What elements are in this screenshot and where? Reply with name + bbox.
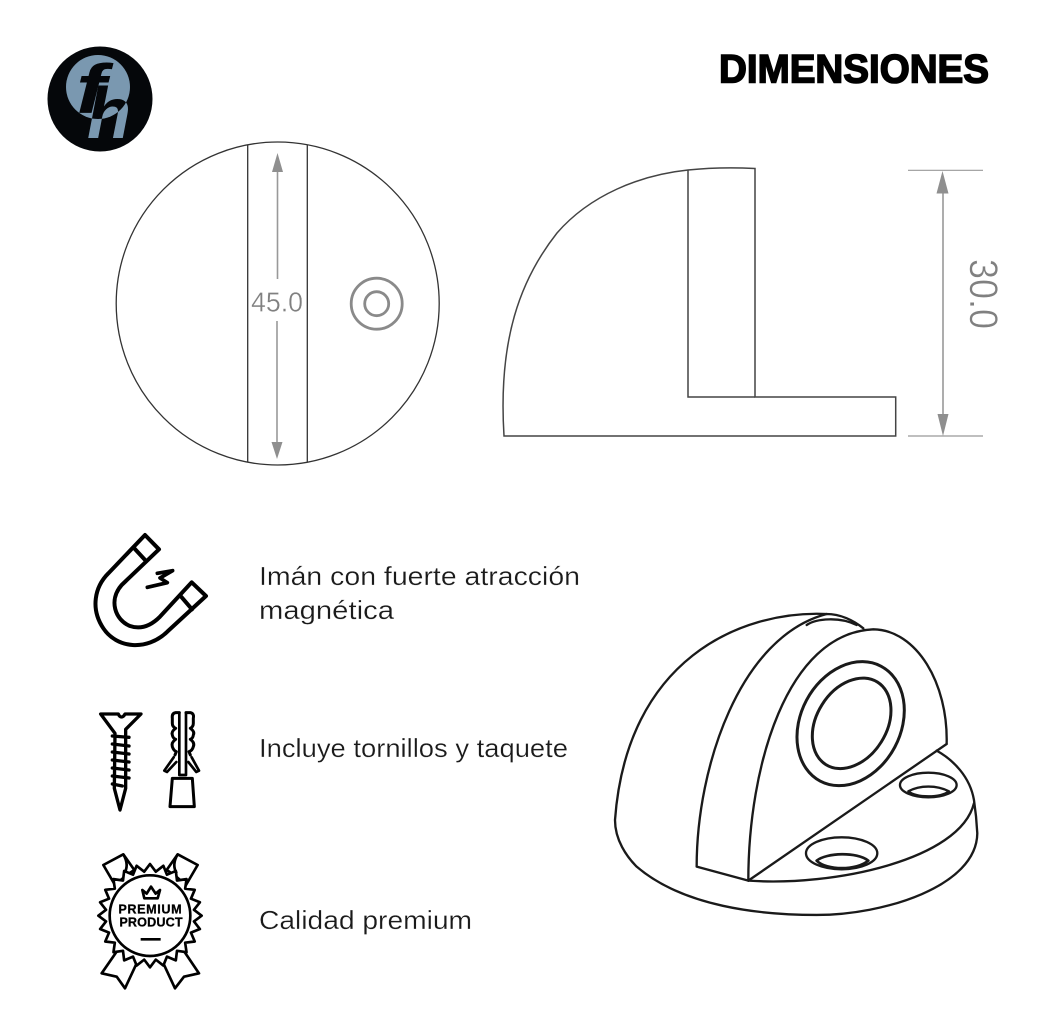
icon: screw and wall plug (101, 713, 199, 810)
top view diagram (116, 142, 439, 465)
logo: fh: h (87, 74, 131, 154)
title: DIMENSIONES (719, 48, 989, 92)
icon: magnet (95, 535, 206, 645)
feature text: screws: Incluye tornillos y taquete (259, 733, 568, 763)
feature text: premium: Calidad premium (259, 905, 472, 935)
side view diagram (503, 168, 1005, 436)
logo: fh: f (76, 50, 115, 128)
dimension label: 45.0: 45.0 (251, 286, 303, 318)
dimension label: 30.0: 30.0 (961, 259, 1005, 329)
icon: premium product badge: PREMIUM (118, 902, 182, 916)
feature text: magnet: magnética (259, 595, 395, 625)
dimension arrow: 45.0 (272, 153, 283, 459)
dimension arrow: 30.0 (908, 170, 983, 436)
product illustration: door stop (615, 614, 977, 915)
feature text: magnet: Imán con fuerte atracción (259, 561, 580, 591)
magnet rings (776, 643, 925, 805)
screw hole: front (806, 837, 877, 869)
screw hole: rear (900, 773, 957, 797)
feature text: magnet (259, 561, 580, 625)
logo: fh (48, 46, 152, 154)
icon: premium product badge: PRODUCT (119, 916, 183, 930)
logo: fh: h (87, 74, 131, 154)
icon: premium product badge (98, 854, 202, 988)
icon: magnet hole (351, 278, 402, 329)
